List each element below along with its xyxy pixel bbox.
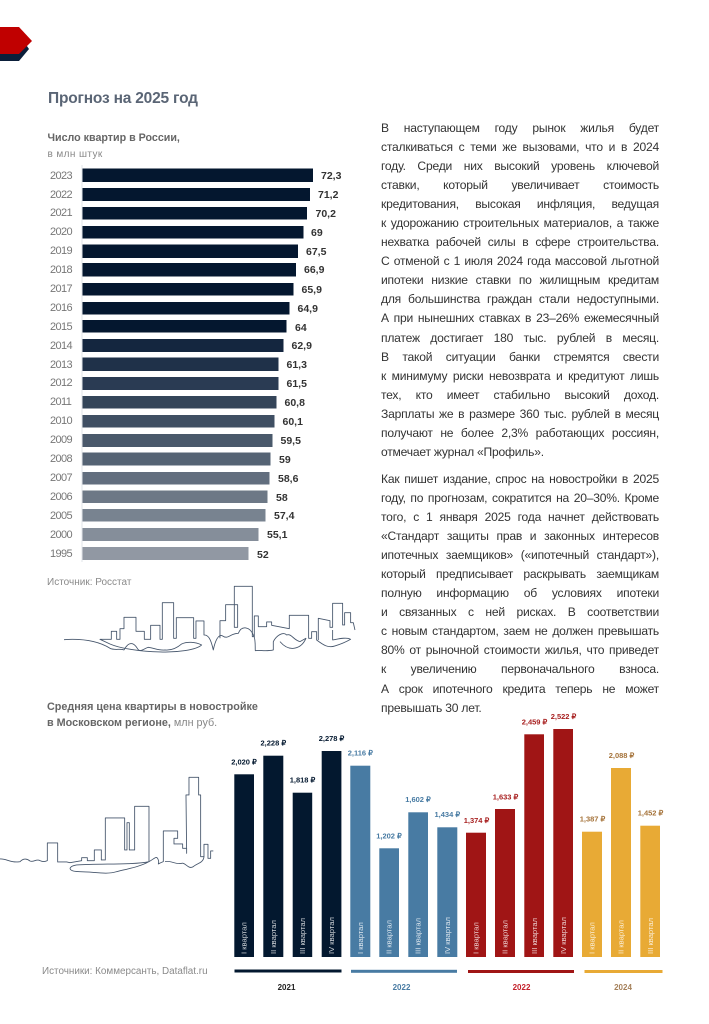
source: Kommersant, Dataflat: Источники: Коммерсанть, Dataflat.ru bbox=[42, 966, 208, 977]
bar 2021 Q4: IV квартал bbox=[327, 917, 336, 954]
text block: first paragraph: ипотеки низкие ставки по жилищным кредитам bbox=[381, 273, 659, 287]
bar 2018: 2018 bbox=[50, 264, 73, 276]
text block: second paragraph: Как пишет издание, спрос на новостройки в 2025 bbox=[381, 472, 659, 486]
bar 2007: 2007 bbox=[50, 472, 73, 484]
heading: price chart bbox=[47, 701, 258, 729]
bar 2023 bbox=[50, 168, 342, 182]
text block: second paragraph: А срок ипотечного кредита теперь не может bbox=[381, 682, 659, 696]
bar red Q4: IV квартал bbox=[559, 917, 568, 954]
bar 2005: 2005 bbox=[50, 510, 73, 522]
year bar 2022 blue bbox=[351, 970, 457, 992]
bar 2024 Q3: III квартал bbox=[646, 918, 655, 954]
bar 2023: 72,3 bbox=[321, 170, 342, 182]
bar 2022 Q2: II квартал bbox=[384, 920, 394, 954]
bar 2005: 57,4 bbox=[274, 510, 295, 522]
bar 2022: 2022 bbox=[50, 189, 73, 201]
bar 2022 Q1: 2,116 ₽ bbox=[348, 748, 373, 758]
bar 2017: 65,9 bbox=[302, 284, 322, 296]
bar 2023: 2023 bbox=[50, 170, 73, 182]
bar 2024 Q3 bbox=[638, 808, 664, 957]
text block: first paragraph: ставки, который увеличивает стоимость bbox=[381, 178, 659, 192]
bar 2019 bbox=[50, 244, 327, 258]
bar 2022: 71,2 bbox=[318, 189, 339, 201]
bar 2021 Q1: 2,020 ₽ bbox=[231, 758, 257, 766]
text block: second paragraph: того, с 1 января 2025 года начнет действовать bbox=[381, 510, 659, 524]
text block: second paragraph: с новым стандартом, заем не должен превышать bbox=[381, 624, 659, 638]
text block: second paragraph: полную информацию об условиях ипотеки bbox=[381, 586, 659, 600]
bar chart: price 2021 bbox=[231, 734, 345, 992]
bar 2006: 2006 bbox=[50, 491, 73, 503]
bar 2011: 2011 bbox=[50, 396, 72, 408]
bar chart: price 2024 bbox=[580, 751, 664, 992]
bar 2000: 55,1 bbox=[267, 529, 288, 541]
bar 2022 bbox=[50, 188, 339, 201]
bar 2018: 66,9 bbox=[304, 264, 325, 276]
bar 2022 Q4: 1,434 ₽ bbox=[434, 810, 460, 819]
text block: first paragraph: В такой ситуации банки стремятся свести bbox=[381, 350, 659, 364]
source: Rosstat: Источник: Росстат bbox=[47, 577, 132, 588]
bar 2022 Q3: 1,602 ₽ bbox=[405, 795, 431, 804]
bar 2024 Q2: 2,088 ₽ bbox=[609, 751, 635, 760]
bar red Q2: 1,633 ₽ bbox=[493, 792, 519, 802]
bar 2014 bbox=[50, 339, 312, 352]
bar 2011 bbox=[50, 396, 305, 409]
bar 2013: 61,3 bbox=[286, 359, 307, 371]
bar 2008: 2008 bbox=[50, 453, 73, 465]
bar 1995: 52 bbox=[257, 549, 269, 561]
bar 2018 bbox=[50, 263, 325, 276]
bar red Q1: 1,374 ₽ bbox=[464, 816, 490, 825]
text block: second paragraph: году, по прогнозам, сократится на 20–30%. Кроме bbox=[381, 491, 659, 505]
text block: first paragraph: получают не более 2,3% работающих россиян, bbox=[381, 426, 659, 440]
bar 2009: 2009 bbox=[50, 434, 73, 446]
bar red Q1 bbox=[464, 816, 490, 957]
year bar 2024: 2024 bbox=[614, 983, 632, 992]
bar 2008 bbox=[50, 452, 291, 466]
bar 2022 Q3 bbox=[405, 795, 431, 957]
bar 2013 bbox=[50, 358, 307, 371]
bar 2021 Q3 bbox=[290, 776, 316, 957]
bar red Q2 bbox=[493, 792, 519, 957]
heading: price chart: Средняя цена квартиры в новостройке bbox=[47, 701, 258, 713]
bar 2017 bbox=[50, 283, 322, 296]
bar 2016: 2016 bbox=[50, 302, 73, 314]
bar 1995 bbox=[50, 547, 269, 561]
bar 2024 Q3: 1,452 ₽ bbox=[638, 808, 664, 818]
text block: second paragraph: к увеличению первоначального взноса. bbox=[381, 662, 659, 676]
bar chart: apartments in Russia bbox=[50, 165, 342, 562]
text block: second paragraph: ипотечных заемщиков» («ипотечный стандарт»), bbox=[381, 548, 659, 562]
bar 2009: 59,5 bbox=[280, 435, 301, 447]
bar red Q3: III квартал bbox=[530, 918, 539, 954]
bar 2020 bbox=[50, 226, 323, 239]
bar 2021 Q2 bbox=[260, 738, 286, 957]
year bar 2021: 2021 bbox=[278, 983, 296, 992]
text block: first paragraph: кредитования, высокая инфляция, ведущая bbox=[381, 197, 659, 211]
text block: second paragraph: 80% от рыночной стоимости жилья, что приведет bbox=[381, 643, 659, 657]
illustration: skyline one bbox=[64, 586, 355, 652]
bar 2015: 64 bbox=[295, 322, 307, 334]
bar 2021: 2021 bbox=[50, 207, 73, 219]
bar red Q1: I квартал bbox=[472, 922, 480, 954]
text block: second paragraph bbox=[381, 472, 659, 715]
bar red Q3 bbox=[522, 718, 548, 957]
bar 2022 Q4: IV квартал bbox=[443, 917, 452, 954]
text block: first paragraph: сталкиваться с теми же вызовами, что и в 2024 bbox=[381, 140, 659, 154]
text block: second paragraph: и связанных с ней рисках. В соответствии bbox=[381, 605, 659, 619]
text block: first paragraph: отмечает журнал «Профиль». bbox=[381, 445, 544, 459]
heading: price chart: в Московском регионе, млн руб. bbox=[47, 717, 217, 729]
text block: first paragraph: году. Среди них высокий уровень ключевой bbox=[381, 159, 659, 173]
bar 2021 bbox=[50, 207, 336, 220]
bar 2006 bbox=[50, 490, 288, 504]
heading: apartments chart: в млн штук bbox=[48, 149, 103, 160]
bar chart: price 2022 red bbox=[464, 712, 577, 992]
year bar 2022 blue: 2022 bbox=[393, 983, 411, 992]
bar 2024 Q2 bbox=[609, 751, 635, 957]
text block: first paragraph bbox=[381, 121, 659, 459]
bar 2016: 64,9 bbox=[298, 303, 318, 315]
bar 2013: 2013 bbox=[50, 359, 73, 371]
bar 2012: 61,5 bbox=[286, 378, 307, 390]
year bar 2022 red bbox=[468, 970, 574, 992]
bar 2024 Q1 bbox=[580, 814, 606, 957]
illustration: skyline two bbox=[0, 777, 213, 873]
text block: first paragraph: А при нынешних ставках в 23–26% ежемесячный bbox=[381, 311, 659, 325]
bar 2020: 69 bbox=[311, 227, 323, 239]
bar 2010: 2010 bbox=[50, 415, 73, 427]
year bar 2022 red: 2022 bbox=[513, 983, 531, 992]
bar chart: price 2022 blue bbox=[348, 748, 460, 992]
bar 2024 Q1: I квартал bbox=[588, 922, 596, 954]
heading: apartments chart: Число квартир в России, bbox=[48, 132, 180, 144]
bar red Q3: 2,459 ₽ bbox=[522, 718, 548, 726]
text block: first paragraph: к удорожанию строительных материалов, а также bbox=[381, 216, 659, 230]
bar 2019: 67,5 bbox=[306, 246, 327, 258]
text block: first paragraph: для большинства граждан стали недоступными. bbox=[381, 292, 659, 306]
text block: first paragraph: нехватка рабочей силы в сфере строительства. bbox=[381, 235, 659, 249]
bar 2009 bbox=[50, 434, 301, 447]
bar 2015: 2015 bbox=[50, 321, 73, 333]
bar 2017: 2017 bbox=[50, 283, 73, 295]
bar red Q4 bbox=[551, 712, 577, 957]
text block: first paragraph: к минимуму риски невозврата и кредитуют лишь bbox=[381, 369, 659, 383]
heading: apartments chart bbox=[48, 132, 180, 160]
bar 2021 Q4 bbox=[319, 734, 345, 957]
bar 2021: 70,2 bbox=[316, 208, 336, 220]
bar 2019: 2019 bbox=[50, 245, 73, 257]
bar 2021 Q3: III квартал bbox=[298, 918, 307, 954]
bar 2000 bbox=[50, 528, 288, 541]
bar 2021 Q2: 2,228 ₽ bbox=[260, 738, 286, 748]
bar 2011: 60,8 bbox=[284, 397, 305, 409]
bar 2022 Q2: 1,202 ₽ bbox=[376, 832, 402, 840]
title: Прогноз на 2025 год bbox=[48, 90, 198, 107]
year bar 2024 bbox=[584, 970, 662, 992]
bar 2021 Q2: II квартал bbox=[269, 920, 278, 954]
bar 1995: 1995 bbox=[50, 548, 73, 560]
bar red Q2: II квартал bbox=[500, 920, 510, 954]
text block: first paragraph: тех, кто имеет стабильно высокий доход. bbox=[381, 388, 659, 402]
bar 2015 bbox=[50, 320, 307, 334]
bar 2021 Q3: 1,818 ₽ bbox=[290, 776, 316, 784]
bar 2005 bbox=[50, 509, 295, 522]
bar 2024 Q2: II квартал bbox=[616, 920, 626, 954]
bar 2022 Q2 bbox=[376, 832, 402, 957]
icon: logo arrow bbox=[0, 27, 32, 61]
bar 2010: 60,1 bbox=[282, 416, 303, 428]
text block: first paragraph: В наступающем году рынок жилья будет bbox=[381, 121, 659, 135]
year bar 2021 bbox=[234, 970, 342, 992]
bar 2021 Q1: I квартал bbox=[240, 922, 248, 954]
bar 2021 Q1 bbox=[231, 758, 257, 957]
bar 2000: 2000 bbox=[50, 529, 73, 541]
text block: first paragraph: Зарплаты же в размере 360 тыс. рублей в месяц bbox=[381, 407, 659, 421]
bar red Q4: 2,522 ₽ bbox=[551, 712, 577, 721]
bar 2022 Q4 bbox=[434, 810, 460, 957]
bar 2020: 2020 bbox=[50, 226, 73, 238]
bar 2022 Q1 bbox=[348, 748, 373, 957]
bar 2006: 58 bbox=[276, 492, 288, 504]
text block: second paragraph: «Стандарт защиты прав и законных интересов bbox=[381, 529, 659, 543]
bar 2012 bbox=[50, 377, 307, 390]
bar 2014: 62,9 bbox=[292, 340, 312, 352]
bar 2012: 2012 bbox=[50, 377, 73, 389]
bar 2014: 2014 bbox=[50, 340, 73, 352]
bar 2022 Q3: III квартал bbox=[414, 918, 422, 954]
bar 2016 bbox=[50, 302, 318, 315]
bar 2021 Q4: 2,278 ₽ bbox=[319, 734, 345, 743]
text block: first paragraph: платеж достигает 180 тыс. рублей в месяц. bbox=[381, 331, 659, 345]
text block: second paragraph: который предписывает раскрывать заемщикам bbox=[381, 567, 659, 581]
text block: first paragraph: С отменой с 1 июля 2024 года массовой льготной bbox=[381, 254, 659, 268]
bar 2022 Q1: I квартал bbox=[356, 922, 365, 954]
bar 2007 bbox=[50, 472, 299, 485]
bar 2008: 59 bbox=[279, 454, 291, 466]
bar 2010 bbox=[50, 415, 303, 428]
bar 2007: 58,6 bbox=[278, 473, 299, 485]
bar 2024 Q1: 1,387 ₽ bbox=[580, 814, 606, 824]
text block: second paragraph: превышать 30 лет. bbox=[381, 701, 482, 715]
